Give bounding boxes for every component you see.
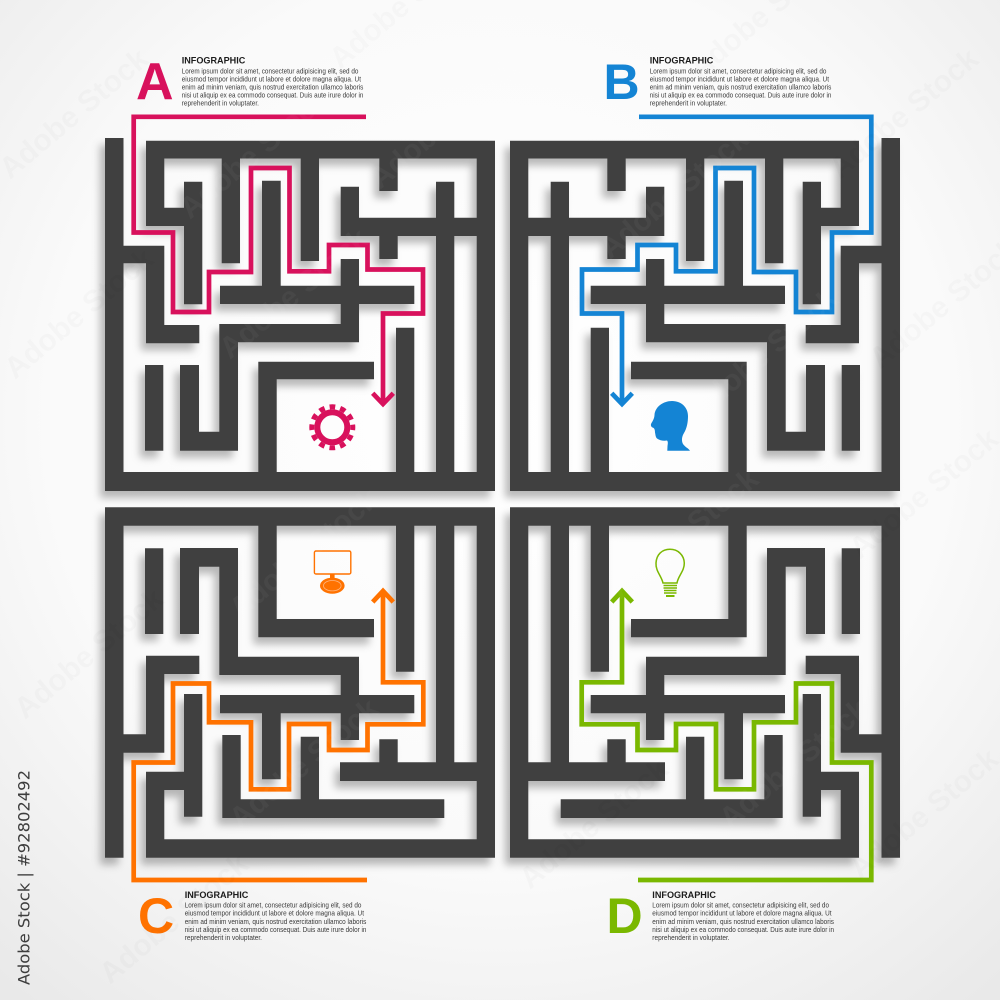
letter D: D: [606, 888, 643, 944]
maze B walls: [510, 138, 900, 491]
letter B: B: [604, 54, 640, 110]
text block C: enim ad minim veniam, quis nostrud exercitation ullamco laboris: [185, 917, 367, 926]
text block D: Lorem ipsum dolor sit amet, consectetur adipisicing elit, sed do: [652, 901, 829, 910]
watermark: Adobe Stock pattern: Adobe Stock: [223, 692, 385, 835]
text block D: enim ad minim veniam, quis nostrud exercitation ullamco laboris: [652, 917, 834, 926]
text block A: [182, 56, 364, 108]
text block B: [650, 56, 832, 108]
panel D: light bulb maze: [510, 507, 900, 944]
text block A: INFOGRAPHIC: [182, 56, 246, 66]
text block B: INFOGRAPHIC: [650, 56, 714, 66]
text block A: enim ad minim veniam, quis nostrud exercitation ullamco laboris: [182, 82, 364, 92]
text block A: reprehenderit in voluptater.: [182, 99, 259, 108]
text block C: [185, 890, 367, 942]
path A arrow: [134, 117, 423, 404]
text block D: [652, 890, 834, 942]
text block D: eiusmod tempor incididunt ut labore et dolore magna aliqua. Ut: [652, 909, 832, 918]
maze D walls: [510, 507, 900, 858]
text block D: INFOGRAPHIC: [652, 890, 716, 900]
text block C: Lorem ipsum dolor sit amet, consectetur adipisicing elit, sed do: [185, 901, 361, 910]
text block B: nisi ut aliquip ex ea commodo consequat. Duis aute irure dolor in: [650, 91, 831, 100]
maze C walls: [105, 507, 495, 858]
letter A: A: [136, 53, 174, 111]
maze A walls: [105, 138, 495, 491]
text block C: INFOGRAPHIC: [185, 890, 249, 900]
text block D: nisi ut aliquip ex ea commodo consequat. Duis aute irure dolor in: [652, 925, 834, 934]
watermark: Adobe Stock pattern: Adobe Stock: [173, 82, 335, 225]
panel A: gear maze: [105, 53, 495, 491]
text block A: eiusmod tempor incididunt ut labore et dolore magna aliqua. Ut: [182, 74, 361, 83]
watermark: Adobe Stock pattern: Adobe Stock: [683, 282, 845, 425]
text block C: nisi ut aliquip ex ea commodo consequat. Duis aute irure dolor in: [185, 925, 366, 934]
text block B: reprehenderit in voluptater.: [650, 99, 727, 108]
text block B: eiusmod tempor incididunt ut labore et dolore magna aliqua. Ut: [650, 74, 829, 83]
panel B: head maze: [510, 54, 900, 491]
text block B: enim ad minim veniam, quis nostrud exercitation ullamco laboris: [650, 82, 832, 92]
text block D: reprehenderit in voluptater.: [652, 933, 730, 942]
letter C: C: [138, 888, 174, 944]
path C arrow: [134, 591, 423, 880]
text block B: Lorem ipsum dolor sit amet, consectetur adipisicing elit, sed do: [650, 66, 826, 75]
text block C: eiusmod tempor incididunt ut labore et dolore magna aliqua. Ut: [185, 909, 364, 918]
icon: monitor: [314, 551, 351, 594]
icon: light bulb: [656, 549, 684, 596]
icon: gear: [312, 407, 353, 448]
watermark: Adobe Stock pattern: Adobe Stock: [213, 222, 375, 365]
watermark: Adobe Stock pattern: Adobe Stock: [223, 482, 385, 625]
icon: head: [651, 401, 690, 451]
path D arrow: [582, 591, 871, 880]
stock id label: Adobe Stock | #92802492: [14, 770, 33, 985]
watermark: Adobe Stock pattern: Adobe Stock: [603, 462, 765, 605]
panel C: monitor maze: [105, 507, 495, 944]
path B arrow: [582, 117, 871, 404]
text block A: nisi ut aliquip ex ea commodo consequat. Duis aute irure dolor in: [182, 91, 363, 100]
watermark: Adobe Stock pattern: Adobe Stock: [713, 692, 875, 835]
watermark: Adobe Stock pattern: Adobe Stock: [593, 122, 755, 265]
text block A: Lorem ipsum dolor sit amet, consectetur adipisicing elit, sed do: [182, 66, 358, 75]
watermark: Adobe Stock pattern: Adobe Stock: [363, 52, 525, 195]
text block C: reprehenderit in voluptater.: [185, 933, 262, 942]
